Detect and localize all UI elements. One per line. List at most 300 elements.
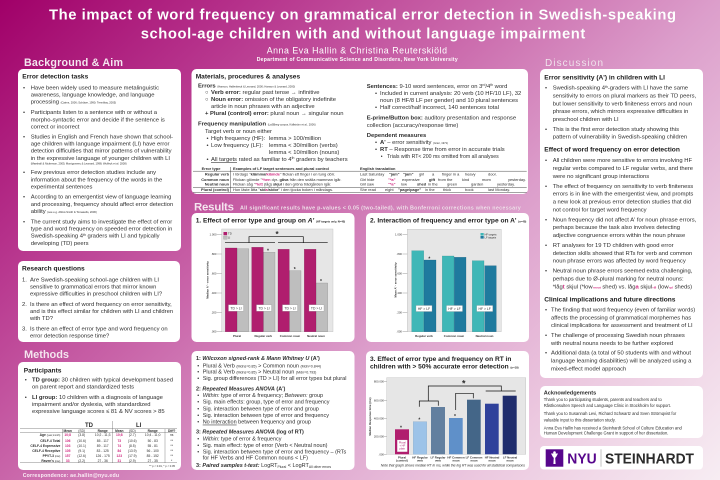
effect of word frequency: a new look at previous error detection studies that did (553, 200, 691, 206)
bar chart: error type and group: .400 (211, 291, 217, 295)
frequency manipulation text: lemma < 30/million (verbs) (269, 143, 338, 149)
errors text: + Plural (control) error: plural noun → singular noun (205, 111, 344, 117)
effect of word frequency: All children were more sensitive to errors involving HF (553, 158, 692, 164)
error sensitivity: phrase errors, which mirrors expressive difficulties in (553, 109, 688, 115)
errors text: article in noun phrases with an adjective (211, 104, 315, 110)
participants table: LI (136, 423, 142, 429)
legend: LF targets (484, 235, 497, 239)
panel: acknowledgements: Råstkonsulten Speech and Language Clinic in Stockholm for support. (544, 403, 671, 408)
bar chart: error type and group (206, 229, 333, 338)
error type table: shed (417, 182, 427, 186)
panel: statistical analyses: Sig. interaction between type of error and frequency – (RTs (203, 450, 347, 456)
significance brackets: * (267, 248, 269, 254)
effect of word frequency: • (545, 269, 547, 275)
authors and affiliation: Department of Communicative Science and Disorders, New York University (257, 57, 458, 63)
panel: error detection tasks: age children with language impairment (LI) have error (31, 142, 169, 148)
significance brackets: * (294, 267, 296, 273)
participants table: Mean (63, 429, 72, 433)
sentences and measures text: Half correct/half incorrect, 140 sentences total (380, 105, 499, 111)
category labels: LF Regular (430, 456, 446, 460)
error type table: book (465, 187, 474, 192)
panel: participants: • (25, 378, 27, 384)
title: The impact of word frequency on grammatical error detection in Swedish-speaking (49, 8, 676, 24)
participants table: 10;2 - 11;3 (95, 433, 111, 437)
sentences and measures text: • (375, 91, 377, 97)
panel: error detection tasks: Participants listen to a sentence with or without a (31, 110, 158, 116)
participants table: 27 - 36 (98, 459, 108, 463)
legend (480, 232, 497, 239)
effect of word frequency: • (545, 217, 547, 223)
effect of word frequency: • (545, 184, 547, 190)
error sensitivity (544, 74, 697, 140)
error sensitivity: This is the first error detection study showing this (553, 127, 679, 133)
clinical implications: • (545, 333, 547, 339)
panel: acknowledgements: Human Development Challenge Grant in support of her dissertation. (544, 431, 668, 436)
participants table: Diff? (168, 429, 175, 433)
panel: error detection tasks: Swedish-speaking 4 (31, 234, 83, 240)
error type table: door. (488, 171, 497, 176)
error type table: saw (367, 182, 374, 186)
plural bar label: + HF (399, 444, 406, 448)
bar chart: response time (368, 378, 526, 462)
error type table: Flickan glömde "*hen dyr- gåva från den snälla mamman igår. (233, 177, 341, 182)
panel: chart 2 (366, 213, 529, 342)
participants table: 33 (66, 459, 70, 463)
panel: statistical analyses: < LogRT (286, 463, 310, 469)
effect of word frequency: adjective congruence errors within the noun phrase (553, 233, 685, 239)
legend: HF targets (484, 232, 497, 236)
errors text: ○ (205, 90, 209, 96)
participants table: ** (170, 449, 174, 453)
panel: statistical analyses: • (197, 363, 199, 369)
clinical implications: mixed-effect model approach (551, 367, 626, 373)
sentences and measures text: noun (8 HF/8 LF per gender) and 10 plural sentences (380, 98, 518, 104)
error sensitivity: th (605, 85, 608, 89)
panel: chart 3: children with > 50% accurate error detection (n=19) (370, 363, 519, 370)
panel: error detection tasks: Have been widely used to measure metalinguistic (31, 86, 159, 92)
panel: error detection tasks: ability (see e.g. Abbot-Smith & Tomasello, 2006) (31, 209, 97, 215)
category labels: LF Common (466, 456, 483, 460)
participants table: (SD) (78, 429, 85, 433)
frequency difference labels: HF > LF (479, 307, 491, 311)
panel: research questions: sensitive to grammatical errors that mirror known (30, 284, 156, 290)
clinical implications: • (545, 351, 547, 357)
panel: error detection tasks: awareness, language knowledge, and language (31, 93, 154, 99)
bar chart: error type and group: Neutral noun (307, 334, 325, 338)
panel: research questions (18, 261, 180, 342)
participants table: 105 (65, 449, 71, 453)
bar chart: frequency and error type: Mean A' - error sensitivity (394, 262, 398, 298)
participants table: (8.5) (129, 444, 136, 448)
frequency difference labels: HF > LF (418, 307, 430, 311)
bar chart: frequency and error type: .000 (397, 330, 402, 334)
participants table: 56 - 100 (147, 449, 159, 453)
group difference labels: TD > LI (230, 306, 242, 310)
bar chart: frequency and error type: .400 (397, 291, 402, 295)
participants table: 50 - 83 (148, 439, 158, 443)
panel: participants: impairment and/or dyslexia, with standardized (32, 402, 151, 408)
participants table: (12.6) (77, 454, 86, 458)
error type table: yesterday. (497, 182, 515, 186)
error type table (193, 166, 527, 192)
participants table: (9.1) (78, 449, 85, 453)
panel: research questions: Research questions (22, 266, 85, 272)
panel: research questions: 2. (22, 302, 27, 308)
sentences and measures text: collection (accuracy/response time) (367, 123, 458, 129)
panel: statistical analyses: • (197, 393, 199, 399)
significance brackets: * (462, 378, 466, 388)
participants table: (13.9) (128, 449, 137, 453)
category labels: Plural (398, 456, 406, 460)
sentences and measures text: rd (482, 83, 485, 87)
participants table: 27 - 35 (148, 459, 158, 463)
panel: error detection tasks: • (23, 195, 25, 201)
group difference labels (228, 305, 324, 311)
error type table: Plural (control) (201, 187, 230, 192)
participants table: 55 - 81 (148, 444, 158, 448)
participants table: 31 (117, 459, 121, 463)
panel: participants: Participants (24, 367, 62, 374)
participants table: PPVT-3 (raw) (43, 454, 60, 458)
participants table (20, 421, 177, 468)
error type table: from the (438, 177, 453, 182)
error sensitivity: • (545, 86, 547, 92)
title (49, 8, 676, 43)
participants table: ** (170, 454, 174, 458)
panel: error detection tasks: th (83, 233, 86, 237)
panel: acknowledgements: Thank you to participating students, parents and teachers and to (544, 397, 662, 402)
participants table: CELF-4 Receptive (32, 449, 60, 453)
bar chart: response time: 200.000 (374, 435, 384, 439)
participants table: 10;8 (116, 433, 123, 437)
frequency manipulation text: lemma < 10/million (nouns) (269, 150, 339, 156)
clinical implications: affects the processing of grammatical morphemes has (551, 315, 691, 321)
effect of word frequency: • (545, 158, 547, 164)
panel: statistical analyses: 3: Paired samples t-test: LogRT (196, 463, 278, 469)
category labels: (control) (396, 458, 408, 462)
sentences and measures text: th (490, 83, 493, 87)
participants table: ** p < 0.01, * p < 0.05 (149, 464, 176, 468)
error type table: "*a" (388, 182, 396, 186)
panel: statistical analyses: • (197, 400, 199, 406)
clinical implications: clinical implications for assessment and treatment of LI (551, 323, 693, 329)
participants table: 157 (65, 454, 71, 458)
participants table: 126 - 175 (96, 454, 110, 458)
frequency manipulation text: High frequency (HF): (211, 136, 266, 142)
panel: statistical analyses: • (197, 450, 199, 456)
significance brackets: * (400, 426, 402, 432)
bar chart: frequency and error type: Regular verb (415, 334, 433, 338)
panel: statistical analyses: Sig. main effects: group, type of error and frequency (203, 400, 330, 406)
panel: statistical analyses: • (197, 406, 199, 412)
errors text: Verb error: regular past tense → infinitive (211, 90, 320, 96)
bar chart: frequency and error type: * (428, 256, 430, 262)
error sensitivity: but lower sensitivity to verb finiteness errors and noun (553, 102, 692, 108)
bar chart: error type and group: .600 (211, 271, 217, 275)
panel: statistical analyses: 3: Repeated Measures ANOVA (log of RT) (196, 430, 304, 436)
errors text (198, 83, 344, 117)
clinical implications: The challenge of processing Swedish noun phrases (551, 333, 685, 339)
category labels: verb (435, 458, 441, 462)
frequency manipulation text: • (206, 143, 209, 149)
panel: research questions: 1. (22, 277, 27, 283)
significance brackets: * (454, 414, 456, 420)
effect of word frequency: perhaps due to Ø-plural marking for neutral nouns: (553, 277, 684, 283)
significance brackets: * (418, 418, 420, 424)
frequency manipulation text: • (206, 157, 209, 163)
bar chart: frequency and error type (394, 229, 501, 338)
bar chart: frequency and error type: .600 (397, 271, 402, 275)
legend: TD (228, 232, 232, 236)
category labels: verb (417, 458, 423, 462)
panel: error detection tasks: processing (Cairns, 2006; Schütze, 1990; Tremblay, 2005) (31, 100, 116, 106)
clinical implications (544, 296, 695, 373)
panel: statistical analyses: • (197, 443, 199, 449)
panel: statistical analyses: Plural & Verb (Mdns=0.85) > Neutral noun (Mdn=0.793) (203, 370, 316, 376)
panel: participants: TD group: 30 children with typical development based (32, 378, 173, 384)
participants table: Range (148, 429, 158, 433)
frequency manipulation text: All targets rated as familiar to 4 (211, 157, 292, 163)
error type table: Girl (360, 182, 366, 186)
panel: chart 1 (192, 213, 354, 342)
error type table: a (432, 171, 435, 176)
bar chart: error type and group: Common noun (280, 334, 300, 338)
panel: statistical analyses: • (197, 370, 199, 376)
panel: statistical analyses (192, 351, 354, 470)
sentences and measures text: • (381, 154, 383, 160)
effect of word frequency: noun phrase errors was affected by word frequency (553, 258, 686, 264)
effect of word frequency: Effect of word frequency on error detection (544, 147, 680, 154)
panel: acknowledgements: Anna Eva Hallin has received a Steinhardt School of Culture Education and (544, 425, 683, 430)
panel: research questions: Are Swedish-speaking school-age children with LI (30, 277, 159, 283)
authors and affiliation: Anna Eva Hallin & Christina Reuterskiöld (267, 46, 447, 56)
significance brackets: * (275, 230, 279, 239)
participants table: 89 - 117 (97, 444, 109, 448)
category labels: HF Regular (412, 456, 429, 460)
panel: statistical analyses: All other errors (309, 465, 331, 469)
panel: materials, procedures and analyses: Materials, procedures & analyses (196, 74, 300, 81)
error type table: in the (428, 182, 438, 186)
error type table: kind (462, 177, 469, 182)
frequency difference labels (416, 306, 493, 312)
effect of word frequency: regular verbs compared to LF regular verbs, and there (553, 166, 693, 172)
clinical implications: Additional data (a total of 50 students with and without (551, 351, 691, 357)
clinical implications: Clinical implications and future directions (544, 296, 676, 303)
effect of word frequency: • (545, 243, 547, 249)
panel: research questions: Is there an effect of word frequency on error sensitivity, (30, 302, 172, 308)
heading: discussion: Discussion (545, 58, 603, 69)
bar chart: frequency and error type: .800 (397, 252, 402, 256)
bar chart: frequency and error type: Common noun (444, 334, 464, 338)
panel: research questions: and is this effect similar for children with LI and children (30, 309, 173, 315)
panel: error detection tasks: • (23, 110, 25, 116)
panel: error detection tasks: Few previous error detection studies include any (31, 170, 156, 176)
error type table: Flickan såg "*lett (låg) skjul i den gröna trädgården igår. (233, 182, 331, 186)
participants table: (2.2) (78, 459, 85, 463)
bar chart: response time: 600.000 (374, 398, 384, 402)
error type table: heavy (465, 171, 476, 176)
participants table: (SD) (129, 429, 136, 433)
panel: chart 3 (366, 351, 529, 470)
error sensitivity: -graders with LI have the same (608, 86, 688, 92)
errors text: Errors (Hanson, Hallenbeck & Leonard, 2000; Hanson & Leonard, 2000) (198, 83, 295, 89)
panel: statistical analyses: Plural (278, 465, 286, 469)
sentences and measures text: Sentences: 9-10 word sentences, error on 3 (367, 84, 482, 90)
panel: error detection tasks: The current study aims to investigate the effect of error (31, 219, 172, 225)
panel: error detection tasks: • (23, 170, 25, 176)
participants table: 85 - 117 (97, 439, 109, 443)
sentences and measures text: • (375, 105, 377, 111)
category labels: HF Common (447, 456, 465, 460)
plural bar label (397, 440, 407, 452)
frequency manipulation text: • (206, 136, 209, 142)
panel: research questions: Is there an effect of error type and word frequency on (30, 326, 168, 332)
results heading: All significant results have p-values < 0.05 (two-tailed), with Bonferroni corrections when necessary (240, 205, 521, 211)
effect of word frequency: not control for target word frequency (553, 207, 647, 213)
group difference labels: TD > LI (311, 306, 322, 310)
category labels: LF Neutral (503, 456, 517, 460)
participants table: 10;8 (64, 433, 71, 437)
error type table: English translation (360, 166, 396, 171)
legend: LI (228, 236, 231, 240)
participants table: ns (170, 433, 174, 437)
panel: statistical analyses: Sig. main effect: type of error (Verb < Neutral noun) (203, 443, 328, 449)
panel: error detection tasks: (Marshall & Nickerson, 2005; Montgomery & Leonard, 1998; Wulfeck et al. 2008) (31, 162, 127, 166)
error type table: Neutral noun (205, 182, 230, 186)
sentences and measures text: /4 (485, 84, 491, 90)
error type table: last Monday. (488, 187, 510, 192)
participants table: CELF-4 Total (40, 439, 60, 443)
sentences and measures text: RT – Response time from error in accurate trials (380, 147, 505, 153)
panel: chart 3: 3. Effect of error type and frequency on RT in (370, 356, 511, 363)
participants table: 106 (65, 439, 71, 443)
errors text: Noun error: omission of the obligatory indefinite (211, 97, 336, 103)
panel: error detection tasks: detection difficulties that mirror patterns of vulnerability (31, 149, 172, 155)
participants table: 10;4 - 11;0 (145, 433, 161, 437)
panel: research questions: with TD? (29, 316, 54, 322)
error type table: She read (360, 187, 376, 192)
participants table: 84 (117, 449, 121, 453)
error type table: I lördags "klämma/klämde" flickan ett finger i en tung dörr. (233, 171, 335, 176)
bar chart: error type and group: 1.000 (210, 232, 217, 236)
participants table: * (171, 459, 173, 463)
error sensitivity: preschool children with LI (553, 117, 619, 123)
frequency manipulation text: Target verb or noun either (205, 129, 272, 135)
participants table: (2.7) (129, 433, 136, 437)
error type table: garden (471, 182, 483, 186)
participants table: TD (85, 423, 94, 429)
error sensitivity: Swedish-speaking 4 (553, 86, 605, 92)
panel: acknowledgements: Thank you to Susannah Levi, Richard Schwartz and Sven Strömqvist for (544, 411, 677, 416)
clinical implications: with neutral nouns needs to be further explored (550, 341, 673, 347)
bar chart: error type and group: .800 (211, 252, 217, 256)
error type table: finger in a (442, 171, 460, 176)
significance brackets (225, 230, 328, 285)
participants table: ** (170, 439, 174, 443)
clinical implications: • (545, 307, 547, 313)
panel: error detection tasks: and processing, frequency should affect error detection (31, 202, 173, 208)
participants table: Range (98, 429, 108, 433)
clinical implications: The finding that word frequency (even of familiar words) (551, 307, 695, 313)
effect of word frequency: were no significant group interactions (552, 174, 649, 180)
panel: NYU Steinhardt logo (540, 446, 703, 470)
error type table: yesterday. (508, 177, 526, 182)
effect of word frequency: *lågt skjul (*low+neut shed) vs. låga skjul+Ø (low+pl sheds) (553, 284, 692, 291)
participants table: Age (year;month) (40, 433, 60, 437)
sentences and measures text: Trials with RT< 200 ms omitted from all analyses (387, 154, 499, 160)
panel: participants (18, 362, 181, 470)
participants table: CELF-4 Expressive (30, 444, 60, 448)
bar chart: response time: .000 (379, 452, 384, 456)
bar chart: response time: Median Response time (ms) (368, 398, 372, 436)
category labels: noun (452, 458, 460, 462)
panel: statistical analyses: 1: Wilcoxon signed-rank & Mann Whitney U (A') (196, 356, 320, 362)
panel: statistical analyses: • (197, 436, 199, 442)
group difference labels: TD > LI (284, 306, 296, 310)
error type table: Error type (202, 166, 221, 171)
panel: error detection tasks: developing (TD) peers (31, 241, 89, 247)
error sensitivity: Error sensitivity (A') in children with LI (544, 74, 665, 81)
panel: chart 2: 2. Interaction of frequency and error type on A' (n=40) (370, 218, 526, 224)
bar chart: response time: 800.000 (374, 380, 384, 384)
panel: statistical analyses: • (197, 420, 199, 426)
participants table: (10.6) (77, 439, 86, 443)
frequency manipulation text (198, 122, 348, 163)
participants table: ** (170, 444, 174, 448)
category labels: noun (488, 458, 496, 462)
sentences and measures text: • (375, 140, 377, 146)
frequency difference labels: HF > LF (448, 307, 461, 311)
panel: statistical analyses: • (197, 376, 199, 382)
error type table: mom (482, 177, 491, 182)
panel: participants: LI group: 10 children with a diagnosis of language (32, 395, 163, 401)
title: school-age children with and without language impairment (141, 27, 585, 43)
error type table: hide (367, 177, 375, 182)
participants table: Mean (115, 429, 124, 433)
panel: participants: on parent report and standardized tests (32, 385, 134, 391)
participants table: (10.1) (77, 444, 86, 448)
category labels (396, 456, 517, 462)
sentences and measures text: • (375, 147, 377, 153)
panel: statistical analyses: • (197, 413, 199, 419)
category labels: noun (506, 458, 514, 462)
effect of word frequency: errors is in line with the emergentist view, and prompts (553, 192, 693, 198)
panel: error detection tasks: experimental sentences (31, 184, 92, 190)
error type table: Girl (360, 177, 366, 182)
panel: participants: expressive language scores ≤ 81 & NV scores > 85 (32, 409, 165, 415)
sentences and measures text (367, 83, 521, 160)
bar chart: error type and group: .200 (211, 311, 217, 315)
effect of word frequency: Neutral noun phrase errors seemed extra challenging, (553, 269, 693, 275)
sentences and measures text: A' – error sensitivity (Grier, 1971) (380, 140, 448, 146)
panel: statistical analyses: Sig. group differences (TD > LI) for all error types but plural (203, 376, 346, 382)
effect of word frequency: Noun frequency did not affect A' for noun phrase errors, (553, 217, 697, 223)
group difference labels: TD > LI (258, 306, 270, 310)
significance brackets (400, 378, 516, 432)
panel: NYU Steinhardt logo: STEINHARDT (605, 451, 694, 467)
clinical implications: language learning disabilities) will be analyzed using a (551, 359, 692, 365)
error type table: "jam" (403, 171, 414, 176)
participants table: (2.9) (129, 459, 136, 463)
sentences and measures text: word (493, 84, 507, 90)
effect of word frequency: The effect of frequency on sensitivity to verb finiteness (553, 184, 693, 190)
plural bar label: plain (399, 446, 406, 450)
panel: error detection tasks: Error detection tasks (22, 74, 89, 81)
chart note: Note that graph shows median RT in ms, while the log RT was used for all statistical comparisons (381, 463, 525, 467)
plural bar label: Plural (399, 440, 406, 444)
effect of word frequency: perhaps because the task also involves detecting (553, 225, 680, 231)
panel: error detection tasks: graders with LI and typically (86, 234, 160, 240)
